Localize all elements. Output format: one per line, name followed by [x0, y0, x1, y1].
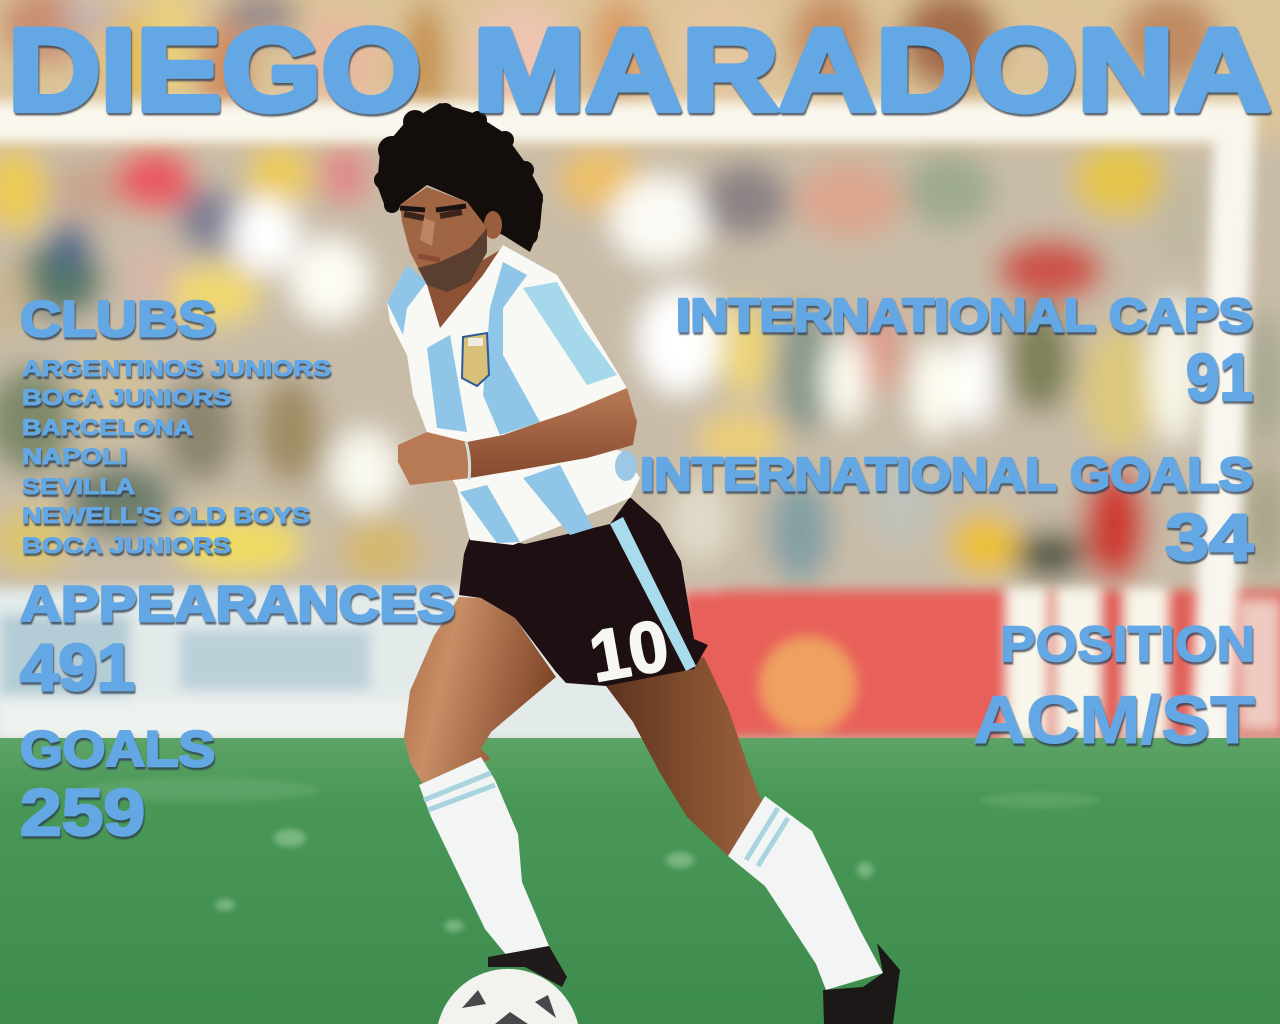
player	[374, 103, 900, 1024]
stat: international caps: 91	[1186, 340, 1253, 414]
stat: position: POSITION	[1000, 616, 1255, 672]
background: advertising boards	[0, 588, 1280, 743]
stat: international goals: 34	[1165, 500, 1253, 574]
stat: international caps: INTERNATIONAL CAPS	[676, 289, 1253, 341]
club list: SEVILLA	[22, 474, 135, 499]
beard	[418, 228, 487, 292]
stat: international goals	[640, 448, 1253, 574]
left sock	[419, 757, 549, 957]
background: blurred crowd	[0, 0, 1280, 595]
hand	[398, 432, 470, 485]
club list: NAPOLI	[22, 444, 127, 469]
left leg	[404, 597, 556, 788]
panel: clubs	[20, 291, 331, 558]
stat: position: ACM/ST	[973, 682, 1255, 758]
bracelet	[466, 442, 470, 480]
heading: clubs: CLUBS	[20, 291, 216, 347]
ear	[484, 211, 502, 239]
hair	[374, 103, 543, 252]
right sock	[728, 796, 883, 990]
jersey badge	[462, 333, 489, 386]
left boot	[488, 946, 567, 987]
stat: appearances	[20, 576, 455, 704]
club list: ARGENTINOS JUNIORS	[22, 356, 331, 381]
stat: appearances: APPEARANCES	[20, 576, 455, 632]
right boot	[823, 943, 900, 1024]
background: goal frame	[0, 102, 1256, 765]
club list: NEWELL'S OLD BOYS	[22, 503, 310, 528]
title: MARADONA	[473, 4, 1271, 135]
sock stripes	[424, 773, 788, 866]
club list: BARCELONA	[22, 415, 193, 440]
stat: goals: 259	[20, 775, 145, 849]
stat: goals	[20, 721, 215, 849]
face details	[400, 206, 466, 260]
stat: appearances: 491	[20, 630, 135, 704]
jersey stripes	[387, 262, 637, 543]
right arm	[467, 388, 637, 478]
title: DIEGO	[8, 4, 421, 135]
background: grass patches	[80, 778, 1100, 932]
shorts number 10: 10	[584, 605, 674, 698]
right leg	[606, 657, 765, 856]
shorts	[459, 497, 708, 686]
ball	[438, 969, 578, 1024]
title	[8, 4, 1271, 135]
background: grass	[0, 738, 1280, 1024]
stat: international goals: INTERNATIONAL GOALS	[640, 448, 1253, 500]
neck	[427, 250, 510, 332]
jersey	[387, 245, 640, 545]
club list: BOCA JUNIORS	[22, 385, 231, 410]
club list	[22, 356, 331, 558]
stat: international caps	[676, 289, 1253, 414]
face	[400, 187, 487, 292]
stat: goals: GOALS	[20, 721, 215, 777]
club list: BOCA JUNIORS	[22, 533, 231, 558]
shorts stripe	[610, 517, 696, 671]
stat: position	[973, 616, 1255, 758]
